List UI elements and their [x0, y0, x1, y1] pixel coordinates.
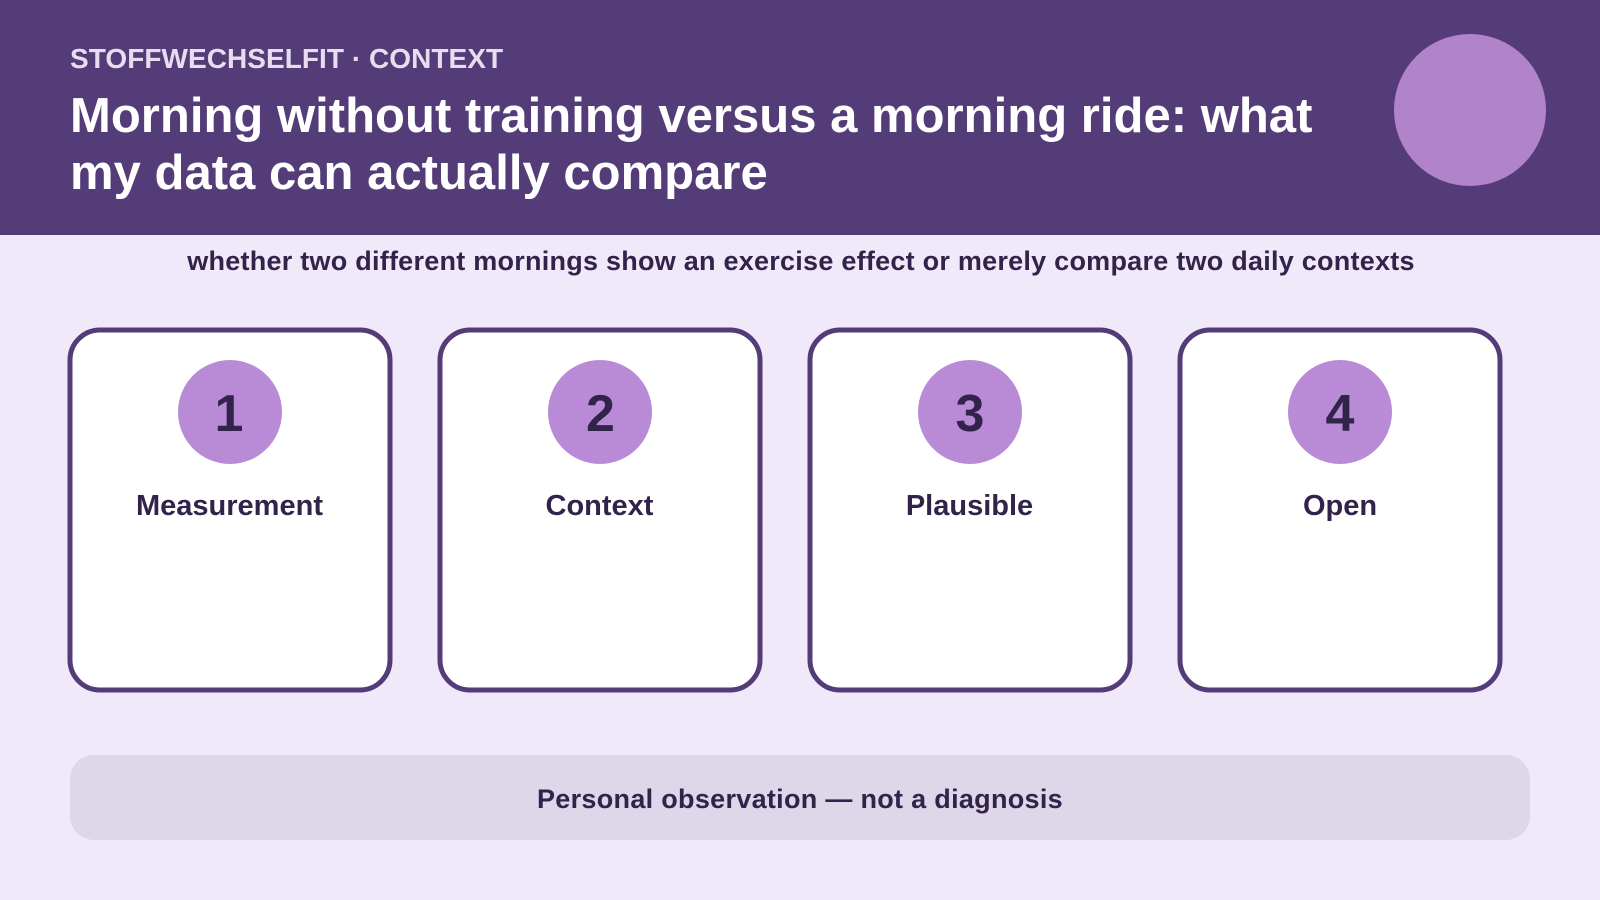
- label: Measurement: Measurement: [136, 490, 323, 522]
- card 4: Open: [1180, 330, 1500, 690]
- badge 2: 2: [586, 385, 615, 443]
- card 1: Measurement: [70, 330, 390, 690]
- subtitle: whether two different mornings show an exercise effect or merely compare two daily contexts: [186, 246, 1415, 276]
- badge 1: [178, 360, 282, 464]
- header circle: [1394, 34, 1546, 186]
- eyebrow: STOFFWECHSELFIT · CONTEXT: [70, 43, 503, 74]
- title: Morning without training versus a morning ride: what: [70, 89, 1312, 143]
- badge 4: 4: [1326, 385, 1355, 443]
- footer note: Personal observation — not a diagnosis: [537, 784, 1063, 814]
- badge 4: [1288, 360, 1392, 464]
- badge 3: 3: [956, 385, 984, 443]
- label: Open: Open: [1303, 490, 1377, 522]
- badge 3: [918, 360, 1022, 464]
- footer note: [70, 755, 1530, 840]
- badge 1: 1: [215, 385, 243, 443]
- card 2: Context: [440, 330, 760, 690]
- label: Context: Context: [546, 490, 654, 522]
- card 3: Plausible: [810, 330, 1130, 690]
- label: Plausible: Plausible: [906, 490, 1033, 522]
- title: my data can actually compare: [70, 146, 768, 200]
- badge 2: [548, 360, 652, 464]
- header band: [0, 0, 1600, 235]
